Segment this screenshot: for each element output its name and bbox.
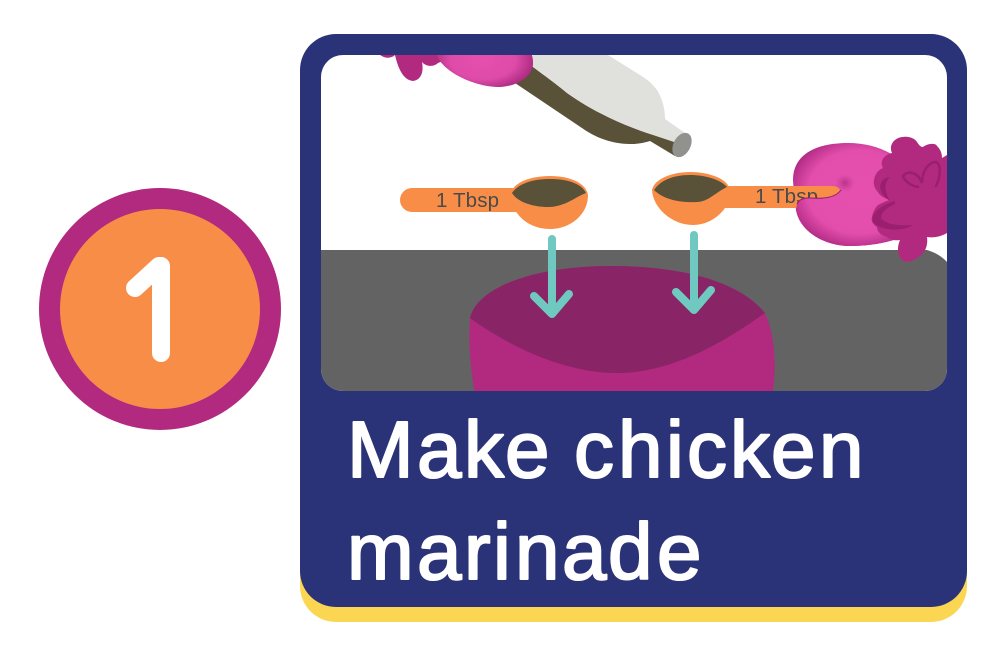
left arrow [534, 239, 569, 314]
left measuring spoon [400, 176, 588, 229]
sleeve cuff [872, 137, 947, 262]
right measuring spoon: 1 Tbsp [755, 185, 818, 208]
top hand holding bottle [380, 55, 534, 87]
card yellow shadow [300, 49, 967, 622]
mixing bowl [469, 266, 775, 395]
right measuring spoon [652, 172, 840, 225]
step number badge: 1 [123, 234, 195, 380]
heading: marinade [347, 507, 702, 596]
right hand palm behind spoon [793, 143, 900, 246]
counter top [321, 250, 947, 391]
step number badge [39, 188, 281, 430]
right arrow [676, 235, 711, 310]
oil bottle [515, 55, 696, 160]
step card [300, 34, 967, 622]
illustration panel [321, 50, 947, 395]
heading: Make chicken [347, 405, 864, 494]
right hand fingers over spoon [796, 176, 894, 246]
left measuring spoon: 1 Tbsp [436, 189, 499, 212]
card navy panel [300, 34, 967, 607]
